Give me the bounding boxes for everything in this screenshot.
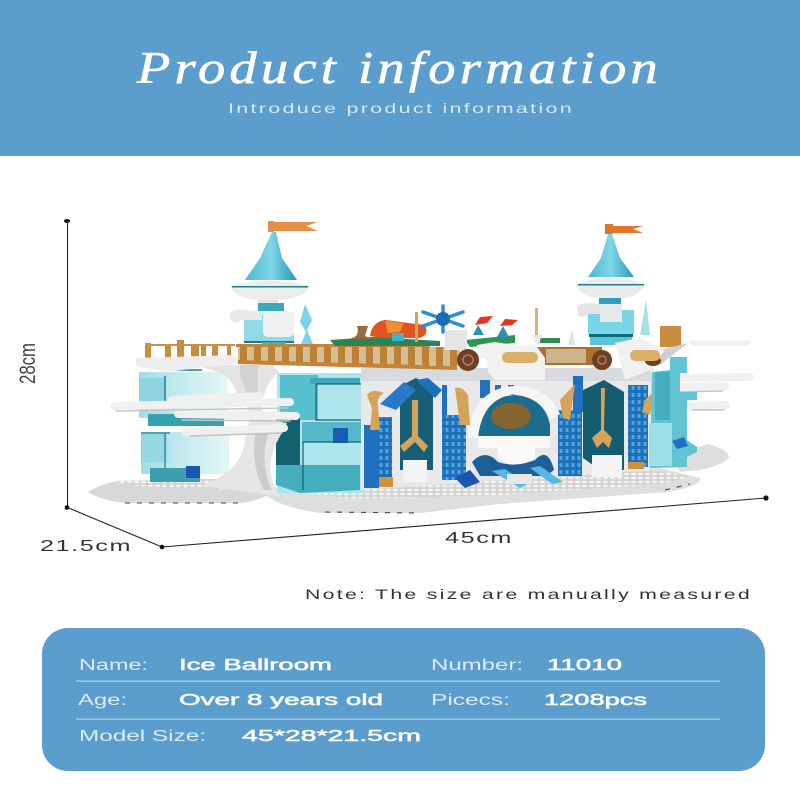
age (78, 692, 383, 709)
rooftop table and feast (330, 306, 665, 380)
main building (361, 368, 655, 490)
roast food (370, 320, 426, 338)
left tower (230, 221, 318, 348)
gold ornaments (367, 384, 655, 452)
crystal (640, 300, 650, 335)
model size: 45*28*21.5cm (242, 728, 421, 745)
gold railing (136, 326, 688, 372)
roof cone (588, 234, 634, 277)
flag (605, 224, 643, 234)
age: Age: (78, 692, 127, 709)
dimension lines (64, 219, 769, 549)
name: Name: (79, 657, 148, 674)
snowflake (423, 306, 463, 332)
left arch (400, 378, 433, 470)
right tower (576, 224, 650, 345)
label: height 28cm: 28cm (15, 343, 40, 384)
disc (576, 278, 645, 298)
model size (79, 728, 421, 745)
label: width 45cm: 45cm (445, 530, 513, 547)
fountain and stairs (472, 455, 554, 476)
white blocks (445, 330, 467, 350)
right ice wall (649, 357, 697, 468)
header banner (0, 0, 800, 156)
panel: specifications (42, 628, 765, 771)
disc (230, 281, 310, 300)
pieces: Picecs: (431, 692, 510, 709)
body (599, 298, 621, 304)
scrolls (457, 349, 479, 371)
note: Note: The size are manually measured (305, 586, 752, 602)
flag (268, 221, 318, 232)
left ice walls (139, 370, 229, 482)
columns (364, 425, 379, 488)
centre medallion (478, 395, 550, 436)
base plates (88, 444, 729, 513)
roof cone (245, 232, 297, 280)
pieces (431, 692, 647, 709)
flames (475, 316, 518, 326)
name (79, 657, 332, 674)
body (258, 303, 284, 311)
snow branches (114, 343, 750, 436)
title: Product information (136, 43, 662, 93)
crystal (300, 304, 313, 344)
gold rolls (502, 352, 538, 363)
age: Over 8 years old (179, 692, 383, 709)
label: depth 21.5cm: 21.5cm (40, 538, 132, 555)
name: Ice Ballroom (179, 657, 332, 674)
tree trunk (200, 365, 287, 496)
middle ice wall (276, 373, 363, 493)
number: 11010 (547, 657, 623, 674)
model size: Model Size: (79, 728, 206, 745)
top wall (361, 368, 651, 381)
pieces: 1208pcs (544, 692, 647, 709)
right arch (583, 380, 624, 470)
number: Number: (431, 657, 523, 674)
number (431, 657, 623, 674)
castle model (88, 221, 750, 513)
row dividers (76, 680, 720, 720)
subtitle: Introduce product information (228, 100, 574, 116)
